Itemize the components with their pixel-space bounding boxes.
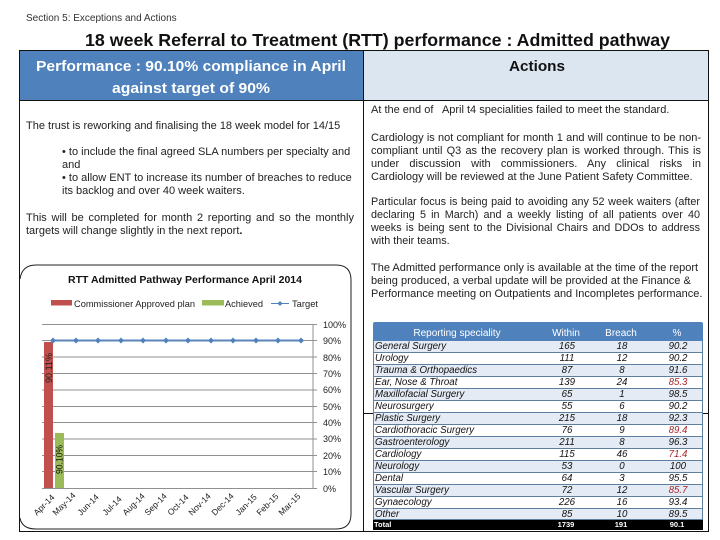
table: reporting speciality: 95.5 bbox=[669, 473, 687, 484]
table: reporting speciality: 93.4 bbox=[669, 497, 687, 508]
legend: Commissioner Approved plan bbox=[74, 299, 195, 309]
table: reporting speciality: 98.5 bbox=[669, 389, 687, 400]
section label: Section 5: Exceptions and Actions bbox=[26, 13, 177, 24]
table: reporting speciality: Plastic Surgery bbox=[375, 413, 440, 424]
y axis labels: 50% bbox=[323, 402, 341, 412]
table: reporting speciality: 55 bbox=[562, 401, 572, 412]
table: reporting speciality: 1739 bbox=[558, 520, 574, 529]
text: model intro: The trust is reworking and finalising the 18 week model for 14/15 bbox=[26, 120, 340, 132]
x axis labels: Jul-14 bbox=[100, 494, 124, 517]
x axis labels: Jun-14 bbox=[75, 492, 101, 517]
table: reporting speciality: 16 bbox=[617, 497, 627, 508]
y axis labels: 60% bbox=[323, 385, 341, 395]
table: reporting speciality: 24 bbox=[617, 377, 627, 388]
table: reporting speciality: 90.2 bbox=[669, 353, 687, 364]
x axis labels: Aug-14 bbox=[120, 491, 147, 517]
table: reporting speciality: % bbox=[673, 328, 681, 339]
table: reporting speciality: 100 bbox=[670, 461, 686, 472]
table: reporting speciality: 226 bbox=[559, 497, 575, 508]
table: reporting speciality: 53 bbox=[562, 461, 572, 472]
text: end of April: At the end of April t4 specialities failed to meet the standard. bbox=[371, 104, 669, 116]
right panel divider bbox=[363, 413, 708, 414]
y axis labels: 100% bbox=[323, 320, 346, 330]
panel: performance header: against target of 90% bbox=[112, 81, 270, 97]
table: reporting speciality: 12 bbox=[617, 485, 627, 496]
table: reporting speciality: Ear, Nose & Throat bbox=[375, 377, 457, 388]
column divider bbox=[363, 101, 364, 531]
table: reporting speciality: Vascular Surgery bbox=[375, 485, 449, 496]
table: reporting speciality: 10 bbox=[617, 509, 627, 520]
table: reporting speciality: 76 bbox=[562, 425, 572, 436]
y axis labels: 20% bbox=[323, 451, 341, 461]
table: reporting speciality: 85 bbox=[562, 509, 572, 520]
table: reporting speciality: 215 bbox=[559, 413, 575, 424]
chart: RTT performance: 90.10% bbox=[54, 445, 64, 474]
panel: actions header bbox=[364, 50, 709, 101]
table: reporting speciality: 3 bbox=[619, 473, 625, 484]
y axis labels: 70% bbox=[323, 369, 341, 379]
x axis labels bbox=[31, 490, 303, 517]
text: bullets: • to allow ENT to increase its number of breaches to reduce bbox=[62, 172, 352, 184]
table: reporting speciality: 111 bbox=[560, 353, 574, 364]
table: reporting speciality: 71.4 bbox=[669, 449, 687, 460]
table: reporting speciality: 92.3 bbox=[669, 413, 687, 424]
table: reporting speciality: 89.5 bbox=[669, 509, 687, 520]
y axis labels: 0% bbox=[323, 484, 336, 494]
legend: Achieved bbox=[225, 299, 263, 309]
table: reporting speciality: 12 bbox=[617, 353, 627, 364]
table: reporting speciality: Other bbox=[375, 509, 399, 520]
table: reporting speciality: 9 bbox=[619, 425, 625, 436]
y axis labels: 30% bbox=[323, 434, 341, 444]
table: reporting speciality: Trauma & Orthopaedics bbox=[375, 365, 477, 376]
table: reporting speciality: 1 bbox=[619, 389, 625, 400]
table: reporting speciality: 191 bbox=[615, 520, 627, 529]
table: reporting speciality: 89.4 bbox=[669, 425, 687, 436]
table: reporting speciality: 90.1 bbox=[670, 520, 684, 529]
table: reporting speciality: 65 bbox=[562, 389, 572, 400]
table: reporting speciality: 165 bbox=[559, 341, 575, 352]
x axis labels: May-14 bbox=[50, 490, 78, 517]
table: reporting speciality: 72 bbox=[562, 485, 572, 496]
table: reporting speciality: 90.2 bbox=[669, 341, 687, 352]
text: bullets: its backlog and over 40 week waiters. bbox=[62, 185, 245, 197]
y axis labels: 10% bbox=[323, 467, 341, 477]
table: reporting speciality: Gynaecology bbox=[375, 497, 432, 508]
table: reporting speciality: Total bbox=[374, 520, 391, 529]
panel frame lines bbox=[19, 101, 709, 532]
table: reporting speciality: 91.6 bbox=[669, 365, 687, 376]
bar labels: 90.11% bbox=[44, 353, 54, 383]
table: reporting speciality: 8 bbox=[619, 365, 625, 376]
table: reporting speciality: Urology bbox=[375, 353, 408, 364]
x axis labels: Mar-15 bbox=[276, 491, 303, 517]
text: cardiology: Cardiology is not compliant for month 1 and will continue to be non-compliant until Q3 as the recovery plan is worked through. This is under discussion with commissioners. Any clinical risks in Cardiology will be reviewed at the June Patient Safety Committee. bbox=[371, 132, 701, 183]
table: reporting speciality: 18 bbox=[617, 341, 627, 352]
y axis labels: 90% bbox=[323, 336, 341, 346]
table: reporting speciality: 85.3 bbox=[669, 377, 687, 388]
title: 18 week Referral to Treatment (RTT) performance : Admitted pathway bbox=[85, 30, 670, 50]
text: month 2 note: This will be completed for month 2 reporting and so the monthly targets will change slightly in the next report. bbox=[26, 212, 354, 237]
x axis labels: Dec-14 bbox=[209, 491, 236, 517]
target line bbox=[50, 338, 304, 344]
table: reporting speciality: 64 bbox=[562, 473, 572, 484]
table: reporting speciality: Cardiology bbox=[375, 449, 421, 460]
y axis labels: 80% bbox=[323, 353, 341, 363]
text: 52 week waiters: Particular focus is being paid to avoiding any 52 week waiters (after declaring 5 in March) and a weekly listing of all patients over 40 weeks is being sent to the Divisional Chairs and DDOs to address with their teams. bbox=[371, 196, 700, 247]
text: bullets: and bbox=[62, 159, 80, 171]
table: reporting speciality: 0 bbox=[619, 461, 625, 472]
bars bbox=[44, 342, 53, 488]
x axis labels: Apr-14 bbox=[31, 492, 57, 517]
table: reporting speciality: Neurology bbox=[375, 461, 419, 472]
table: reporting speciality: 6 bbox=[619, 401, 625, 412]
panel: performance header bbox=[19, 50, 363, 101]
legend: Target bbox=[292, 299, 318, 309]
table: reporting speciality: 87 bbox=[562, 365, 572, 376]
chart title: RTT Admitted Pathway Performance April 2014 bbox=[68, 274, 302, 286]
gridlines bbox=[42, 324, 317, 489]
table: reporting speciality: Reporting speciality bbox=[413, 328, 501, 339]
legend bbox=[51, 299, 318, 309]
table: reporting speciality: 18 bbox=[617, 413, 627, 424]
table: reporting speciality: Cardiothoracic Surgery bbox=[375, 425, 474, 436]
table: reporting speciality: 8 bbox=[619, 437, 625, 448]
table: reporting speciality: 90.2 bbox=[669, 401, 687, 412]
table: reporting speciality: 46 bbox=[617, 449, 627, 460]
x axis labels: Nov-14 bbox=[186, 491, 213, 517]
text: admitted performance: The Admitted performance only is available at the time of the report being produced, a verbal update will be provided at the Finance & Performance meeting on Outpatients and Incompletes performance. bbox=[371, 262, 702, 300]
table: reporting speciality: Neurosurgery bbox=[375, 401, 434, 412]
x axis labels: Jan-15 bbox=[233, 492, 259, 517]
chart: RTT performance bbox=[20, 264, 352, 530]
x axis labels: Sep-14 bbox=[142, 491, 169, 517]
table: reporting speciality: General Surgery bbox=[375, 341, 446, 352]
text: bullets: • to include the final agreed SLA numbers per specialty and bbox=[62, 146, 350, 158]
panel: performance header: Performance : 90.10% compliance in April bbox=[36, 59, 346, 75]
table: reporting speciality: 96.3 bbox=[669, 437, 687, 448]
table: reporting speciality: Maxillofacial Surgery bbox=[375, 389, 464, 400]
table: reporting speciality: Dental bbox=[375, 473, 403, 484]
panel: actions header: Actions bbox=[509, 59, 565, 75]
table: reporting speciality: 139 bbox=[559, 377, 575, 388]
table: reporting speciality: 211 bbox=[559, 437, 575, 448]
text: bullets bbox=[62, 146, 352, 197]
table: reporting speciality: 115 bbox=[559, 449, 575, 460]
x axis labels: Oct-14 bbox=[165, 492, 191, 517]
table: reporting speciality: 85.7 bbox=[669, 485, 687, 496]
y axis labels: 40% bbox=[323, 418, 341, 428]
y axis labels bbox=[323, 320, 346, 494]
table: reporting speciality: Breach bbox=[605, 328, 637, 339]
x axis labels: Feb-15 bbox=[254, 491, 281, 517]
table: reporting speciality: Gastroenterology bbox=[375, 437, 449, 448]
table: reporting speciality: Within bbox=[552, 328, 580, 339]
